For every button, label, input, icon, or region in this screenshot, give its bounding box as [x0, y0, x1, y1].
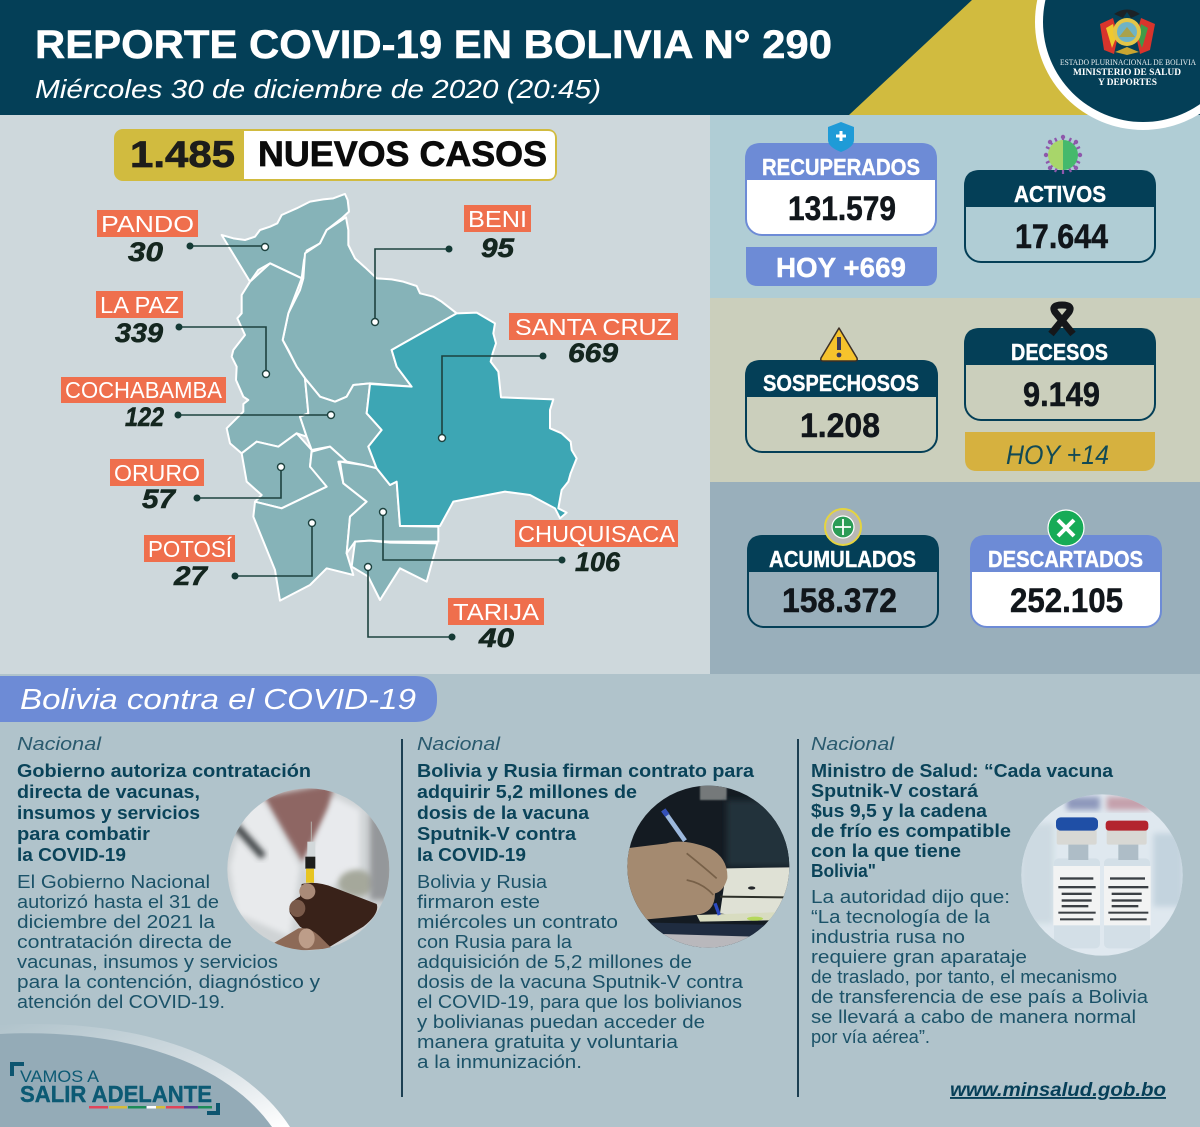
body text: Bolivia y Rusia — [417, 872, 548, 892]
headline — [811, 760, 1114, 881]
headline: la COVID-19 — [417, 844, 526, 865]
stat card: Descartados: 252.105 — [1010, 582, 1123, 620]
stat card: Activos: 17.644 — [1015, 218, 1108, 256]
stat card: Recuperados: RECUPERADOS — [762, 154, 920, 180]
new cases banner — [114, 129, 557, 181]
headline — [17, 760, 311, 865]
category label: Nacional — [17, 734, 102, 754]
stat card: Decesos: DECESOS — [1011, 339, 1108, 365]
ministry logo badge — [1035, 0, 1200, 130]
map callout: Potosi — [144, 520, 316, 591]
divider — [401, 739, 403, 1097]
map callout: Pando: PANDO — [101, 211, 194, 237]
headline: de frío es compatible — [811, 820, 1011, 841]
stat card: Sospechosos — [745, 328, 938, 452]
body text: y bolivianas puedan acceder de — [417, 1012, 705, 1032]
body text — [17, 872, 320, 1012]
map callout: Cochabamba: 122 — [125, 402, 164, 432]
stat card: Descartados — [970, 510, 1162, 627]
body text: vacunas, insumos y servicios — [17, 952, 278, 972]
photo: hand signing a contract — [627, 786, 790, 948]
map callout: Chuquisaca — [380, 508, 678, 577]
icon: plus circle — [825, 509, 861, 545]
map callout: La Paz — [96, 291, 270, 378]
icon: mourning ribbon — [1051, 305, 1073, 334]
news column 3 — [811, 734, 1195, 1101]
body text: autorizó hasta el 31 de — [17, 892, 219, 912]
news column 1 — [17, 734, 400, 1012]
campaign logo: VAMOS A — [20, 1067, 100, 1086]
category label: Nacional — [811, 734, 895, 754]
body text: manera gratuita y voluntaria — [417, 1032, 679, 1052]
new cases banner: NUEVOS CASOS — [258, 135, 547, 174]
headline: directa de vacunas, — [17, 781, 200, 802]
map callout: Tarija: 40 — [478, 623, 514, 653]
panel: new cases map background — [0, 115, 710, 674]
stat card: Activos — [964, 135, 1156, 262]
body text: diciembre del 2021 la — [17, 912, 216, 932]
stat badge: deaths today: HOY +14 — [1006, 440, 1109, 470]
region: Santa Cruz — [367, 313, 577, 526]
stat card: Acumulados: ACUMULADOS — [769, 546, 916, 572]
region: Oruro — [242, 433, 327, 508]
map callout: Pando — [97, 210, 268, 267]
region: Beni — [283, 217, 457, 402]
map callout: Oruro: ORURO — [114, 460, 200, 486]
map callout: Cochabamba — [61, 377, 334, 432]
ministry name: MINISTERIO DE SALUD — [1073, 68, 1181, 78]
stat card: Sospechosos: 1.208 — [800, 407, 880, 445]
headline: $us 9,5 y la cadena — [811, 800, 988, 821]
body text: se llevará a cabo de manera normal — [811, 1007, 1136, 1027]
map callout: Beni: BENI — [468, 206, 527, 232]
campaign logo — [12, 1064, 218, 1113]
body text: miércoles un contrato — [417, 912, 618, 932]
body text: requiere gran aparataje — [811, 947, 1027, 967]
stat card: Recuperados: 131.579 — [788, 190, 896, 228]
stat card: Acumulados: 158.372 — [782, 582, 897, 620]
map of Bolivia — [222, 194, 577, 601]
stat card: Recuperados — [745, 122, 937, 235]
body text: por vía aérea”. — [811, 1027, 930, 1047]
ministry name: Y DEPORTES — [1098, 78, 1157, 88]
headline: Bolivia y Rusia firman contrato para — [417, 760, 755, 781]
body text: dosis de la vacuna Sputnik-V contra — [417, 972, 744, 992]
campaign logo: SALIR ADELANTE — [20, 1081, 212, 1107]
map callout: La Paz: 339 — [115, 318, 163, 348]
map callout: Oruro — [110, 459, 284, 514]
body text: La autoridad dijo que: — [811, 887, 1010, 907]
panel: accumulated and discarded background — [710, 482, 1200, 674]
panel: suspected and deaths background — [710, 298, 1200, 482]
panel: header — [0, 0, 1200, 115]
stat badge: recovered today — [746, 247, 937, 286]
region: Chuquisaca — [340, 462, 438, 553]
body text: atención del COVID-19. — [17, 992, 225, 1012]
stat card: Descartados: DESCARTADOS — [988, 546, 1143, 572]
map callout: La Paz: LA PAZ — [100, 292, 179, 318]
map callout: Chuquisaca: 106 — [575, 547, 621, 577]
body text: para la contención, diagnóstico y — [17, 972, 320, 992]
region: Cochabamba — [300, 378, 382, 468]
body text — [417, 872, 744, 1072]
photo: Sputnik-V vaccine vials — [1021, 794, 1183, 956]
map callout: Potosi: POTOSÍ — [148, 536, 233, 562]
stat badge: recovered today: HOY +669 — [776, 252, 906, 283]
section heading bar — [0, 676, 437, 722]
headline: Sputnik-V contra — [417, 823, 577, 844]
icon: national coat of arms — [1100, 10, 1155, 55]
map callout: Oruro: 57 — [142, 484, 177, 514]
body text: a la inmunización. — [417, 1052, 582, 1072]
icon: virus — [1044, 135, 1082, 174]
headline: insumos y servicios — [17, 802, 200, 823]
panel: recovered and active background — [710, 115, 1200, 298]
body text: con Rusia para la — [417, 932, 573, 952]
icon: shield — [828, 122, 854, 152]
body text: de transferencia de ese país a Bolivia — [811, 987, 1149, 1007]
headline: para combatir — [17, 823, 150, 844]
map callout: Tarija: TARIJA — [453, 599, 540, 625]
icon: cross circle — [1048, 510, 1084, 546]
headline: adquirir 5,2 millones de — [417, 781, 637, 802]
stat card: Decesos — [964, 305, 1156, 420]
headline: Ministro de Salud: “Cada vacuna — [811, 760, 1114, 781]
map callout: Santa Cruz: SANTA CRUZ — [515, 314, 672, 340]
map callout: Chuquisaca: CHUQUISACA — [518, 521, 676, 547]
headline: Bolivia" — [811, 860, 876, 881]
body text: “La tecnología de la — [811, 907, 991, 927]
headline: Sputnik-V costará — [811, 780, 979, 801]
headline: dosis de la vacuna — [417, 802, 590, 823]
region: La Paz — [227, 263, 308, 453]
region: Tarija — [352, 541, 437, 600]
map callout: Beni: 95 — [481, 233, 515, 263]
body text: de traslado, por tanto, el mecanismo — [811, 967, 1117, 987]
body text: contratación directa de — [17, 932, 232, 952]
map callout: Santa Cruz — [438, 313, 678, 442]
map callout: Beni — [372, 205, 531, 326]
headline: con la que tiene — [811, 840, 961, 861]
icon: warning triangle — [821, 328, 857, 361]
map callout: Tarija — [364, 564, 544, 653]
new cases banner: 1.485 — [130, 134, 235, 175]
body text: firmaron este — [417, 892, 540, 912]
date subtitle: Miércoles 30 de diciembre de 2020 (20:45) — [35, 74, 601, 104]
divider — [797, 739, 799, 1097]
photo: syringe vial held in hand — [227, 788, 390, 950]
section heading bar: Bolivia contra el COVID-19 — [20, 684, 416, 716]
stat card: Decesos: 9.149 — [1023, 376, 1100, 414]
stat card: Activos: ACTIVOS — [1014, 181, 1106, 207]
body text: adquisición de 5,2 millones de — [417, 952, 692, 972]
map callout: Santa Cruz: 669 — [568, 338, 618, 368]
body text: El Gobierno Nacional — [17, 872, 210, 892]
map callout: Potosi: 27 — [173, 561, 209, 591]
map callout: Pando: 30 — [128, 237, 163, 267]
ministry name — [1060, 57, 1197, 88]
region: Pando — [222, 194, 349, 282]
region: Potosi — [253, 447, 367, 601]
title: REPORTE COVID-19 EN BOLIVIA N° 290 — [35, 23, 832, 67]
category label: Nacional — [417, 734, 501, 754]
body text: industria rusa no — [811, 927, 965, 947]
body text — [811, 887, 1149, 1047]
stat card: Acumulados — [747, 509, 939, 627]
body text: el COVID-19, para que los bolivianos — [417, 992, 742, 1012]
stat card: Sospechosos: SOSPECHOSOS — [763, 370, 919, 396]
footer curve — [0, 1024, 290, 1127]
headline: la COVID-19 — [17, 844, 126, 865]
website link: www.minsalud.gob.bo — [950, 1080, 1166, 1101]
headline — [417, 760, 755, 865]
stat badge: deaths today — [965, 432, 1155, 471]
map callout: Cochabamba: COCHABAMBA — [65, 377, 223, 403]
headline: Gobierno autoriza contratación — [17, 760, 311, 781]
news column 2 — [417, 734, 800, 1072]
